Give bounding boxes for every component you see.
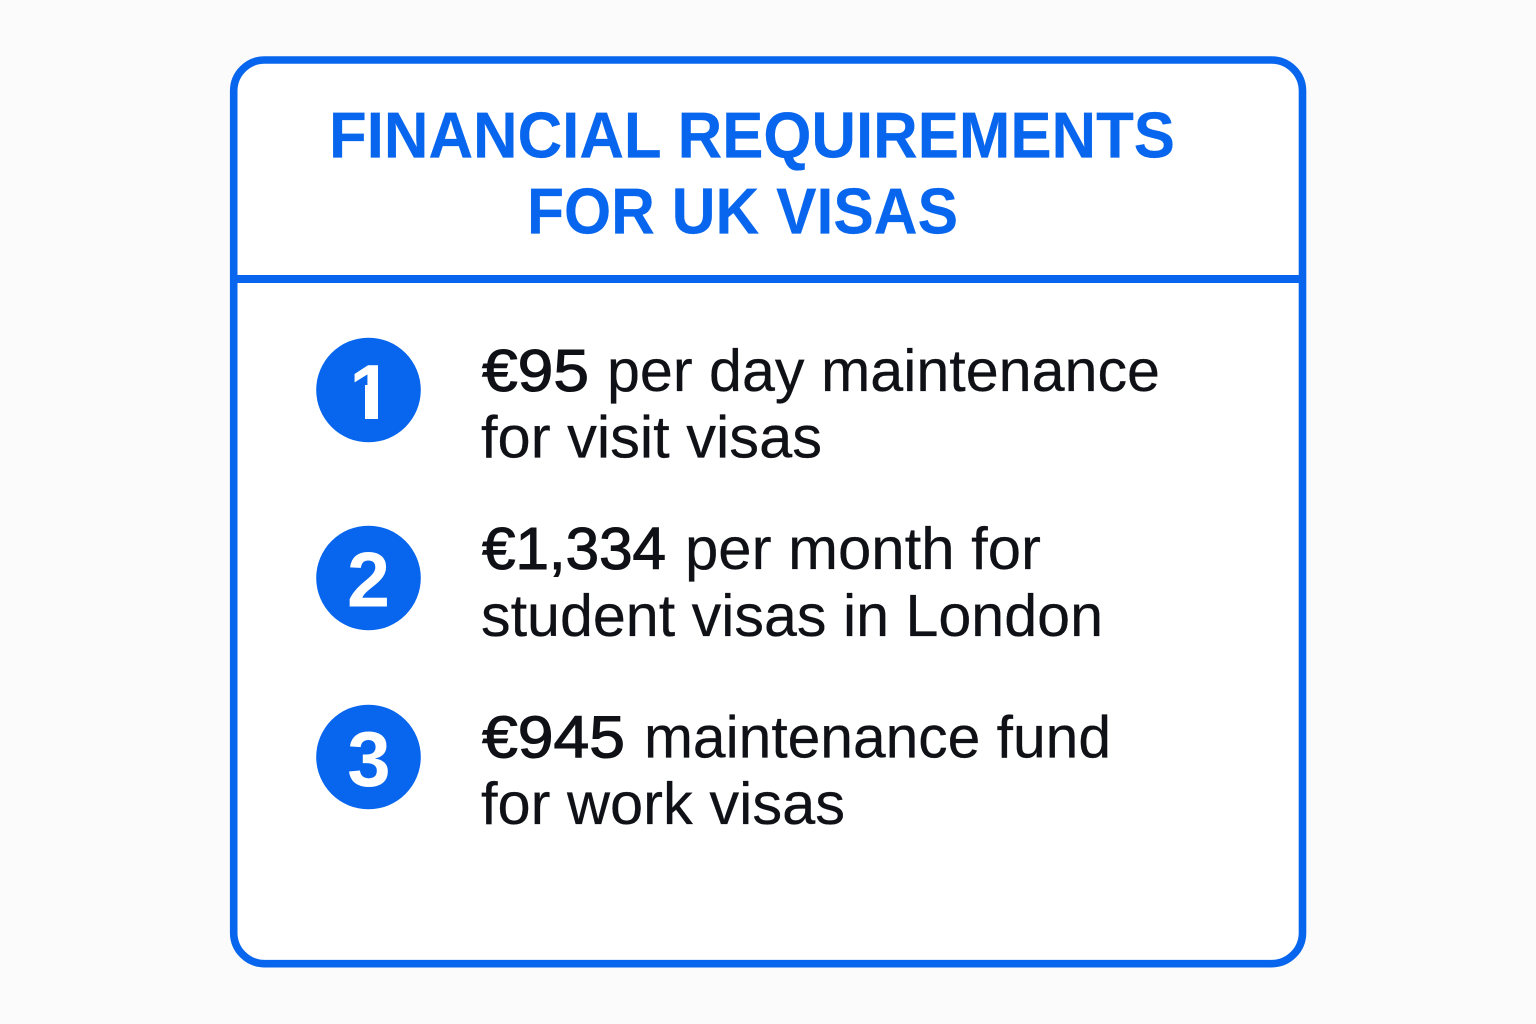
text: work visa maintenance fund: maintenance fund [644, 704, 1111, 770]
icon: number 2 badge: 2 [347, 536, 390, 624]
text: visit visa maintenance [481, 337, 1160, 470]
text: student visa maintenance [481, 515, 1103, 649]
item 3: work visas [316, 704, 1111, 837]
text: work visa maintenance fund [481, 704, 1111, 837]
icon: number 2 badge [316, 526, 421, 630]
panel: financial requirements card [234, 60, 1303, 964]
title: FOR UK VISAS [527, 174, 958, 248]
icon: number 1 badge: 1 [349, 348, 393, 436]
text: work visa maintenance fund: €945 [482, 704, 625, 770]
title [329, 98, 1175, 248]
text: visit visa maintenance: per day maintenance [607, 337, 1160, 404]
icon: number 3 badge: 3 [347, 715, 391, 803]
text: work visa maintenance fund: for work visas [481, 770, 845, 837]
text: visit visa maintenance: for visit visas [481, 404, 822, 470]
text: student visa maintenance: student visas in London [481, 582, 1103, 649]
icon: number 3 badge [316, 705, 421, 809]
item 2: student visas [316, 515, 1103, 649]
text: student visa maintenance: €1,334 [482, 515, 666, 582]
title: FINANCIAL REQUIREMENTS [329, 98, 1175, 172]
text: student visa maintenance: per month for [685, 515, 1041, 582]
item 1: visit visas [316, 337, 1160, 470]
text: visit visa maintenance: €95 [482, 337, 589, 404]
icon: number 1 badge [316, 338, 421, 442]
